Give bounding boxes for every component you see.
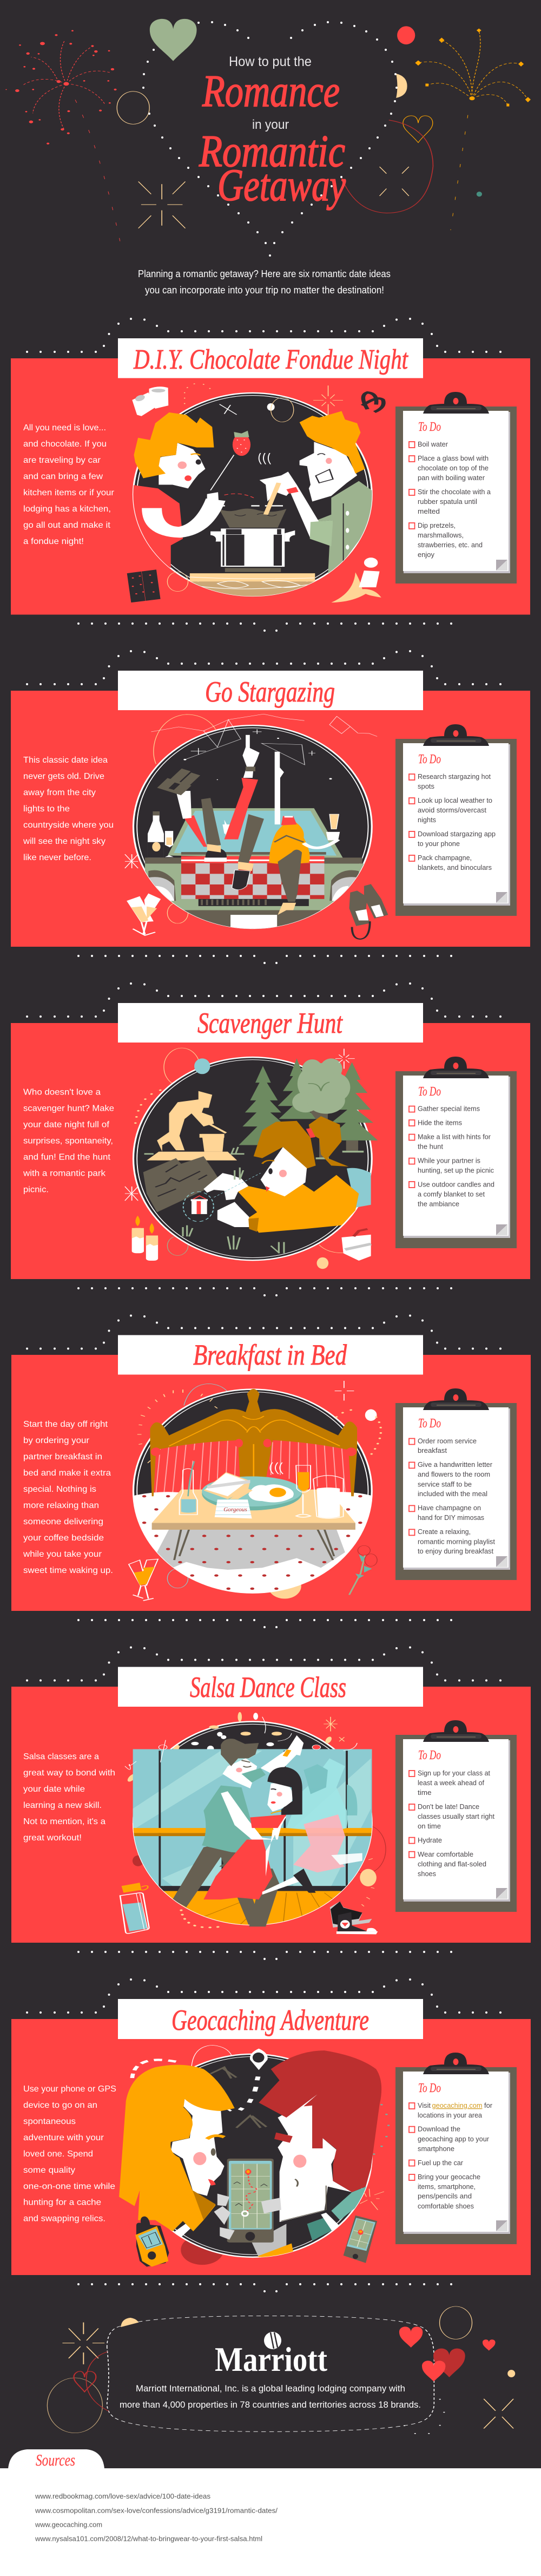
reflection [286,1759,362,1872]
section 5: salsa [11,1648,531,1959]
section 4: breakfast in bed [11,1315,531,1627]
dotted arc [135,1090,161,1125]
icon: circle outline left [47,2378,102,2433]
text block: section 5: learning a new skill. [23,1801,102,1810]
text block: section 4: your coffee bedside [23,1533,104,1543]
to-do clipboard 1: chocolate on top of the [418,464,489,472]
icon: circle outline [117,91,149,124]
to-do clipboard 6: geocaching.com [432,2102,483,2109]
decorations [137,1381,381,1463]
digging figure [144,1091,245,1161]
title: Romantic [199,126,345,176]
banner: section 4 heading: Breakfast in Bed [193,1339,347,1371]
banner: section 1 heading: D.I.Y. Chocolate Fondue Night [133,344,408,375]
icon: cream burst [62,2322,104,2364]
text block: section 2: like never before. [23,853,91,862]
starburst left [138,181,185,228]
to-do clipboard 4: Create a relaxing, [418,1528,471,1536]
to-do clipboard 2: blankets, and binoculars [418,864,492,871]
text block: section 3 [23,1088,114,1194]
to-do clipboard 2: Download stargazing app [418,830,496,838]
text block: section 4: more relaxing than [23,1501,99,1510]
to-do clipboard 1: rubber spatula until [418,498,477,506]
illustration: breakfast in bed [129,1381,381,1601]
banner: section 2 heading: Go Stargazing [205,676,335,708]
icon: GPS device [135,2217,169,2267]
icon: gift box [319,1229,371,1261]
icon: starburst lower [125,1187,138,1201]
to-do clipboard 4: Have champagne on [418,1504,481,1512]
text block: section 4: Start the day off right [23,1420,108,1429]
map stone [143,1156,221,1212]
to-do clipboard 1: enjoy [418,551,435,559]
to-do clipboard 2: to your phone [418,840,460,848]
text block: section 6 [23,2085,116,2224]
icon: cream dot [507,2370,515,2377]
to-do clipboard 3: a comfy blanket to set [418,1191,485,1198]
text block: section 5: Salsa classes are a [23,1752,99,1761]
to-do clipboard 5: Wear comfortable [418,1851,473,1858]
sources list: www.geocaching.com [35,2521,102,2529]
to-do clipboard 5: To Do [418,1748,441,1762]
to-do clipboard 4: Give a handwritten letter [418,1461,492,1469]
text block: section 5 [23,1752,115,1843]
illustration: salsa dancers [120,1712,386,1935]
text block: section 4: partner breakfast in [23,1452,102,1461]
text block: section 3: picnic. [23,1185,49,1194]
sky decorations [167,383,343,592]
dashed frame [107,2316,434,2431]
footprints [191,1713,274,1752]
to-do clipboard 6: To Do [418,2081,441,2095]
panel: section 2 background [11,691,530,947]
to-do clipboard 4: To Do [418,1417,441,1431]
logo: Marriott: Marriott [215,2340,328,2378]
to-do clipboard 6: smartphone [418,2145,454,2153]
text block: section 3: Who doesn't love a [23,1088,101,1097]
man [225,411,365,546]
text block: section 3: surprises, spontaneity, [23,1136,113,1145]
to-do clipboard 5: Sign up for your class at [418,1769,491,1777]
text block: section 6: spontaneous [23,2117,76,2126]
banner: section 3 heading [118,1003,423,1043]
text block: Marriott description: more than 4,000 properties in 78 countries and territories across 18 brands. [120,2400,421,2410]
clothes [252,2224,286,2257]
sources heading: Sources [36,2450,75,2469]
man [219,1735,304,1926]
text block: section 2: This classic date idea [23,756,108,765]
icon: starburst [335,1048,355,1069]
to-do clipboard 3: the ambiance [418,1200,459,1208]
illustration: stargazing on car [125,714,388,939]
breakfast tray [152,1450,355,1560]
banner: section 4 heading [118,1335,423,1375]
text block: section 5: great workout! [23,1833,82,1843]
text block: Marriott description [120,2384,421,2410]
text block: section 4: someone delivering [23,1517,103,1526]
dots below section 2 [78,956,451,963]
stars and lines [183,720,332,780]
icon: phone [344,2216,377,2263]
to-do clipboard 1: Place a glass bowl with [418,455,489,462]
to-do clipboard 6: geocaching app to your [418,2135,489,2143]
decorations [125,1717,377,1928]
sources list: www.cosmopolitan.com/sex-love/confessions/advice/g3191/romantic-dates/ [35,2506,278,2515]
text block: section 2: lights to the [23,804,70,814]
to-do clipboard 3: Use outdoor candles and [418,1181,494,1189]
banner: section 1 heading [118,338,423,378]
to-do clipboard 5: clothing and flat-soled [418,1860,486,1868]
to-do clipboard 1 [395,392,517,584]
to-do clipboard 1: To Do [418,420,441,434]
white footer area [0,2468,541,2576]
text block: section 2: away from the city [23,788,96,797]
header [5,19,531,296]
title: How to put the [229,54,312,69]
to-do clipboard 4: breakfast [418,1447,447,1454]
text block: section 2: countryside where you [23,821,114,830]
left girl [119,2065,235,2231]
to-do clipboard 6: Visit [418,2102,431,2109]
to-do clipboard 3: hunting, set up the picnic [418,1166,494,1174]
icon: roses [349,1545,377,1595]
text block: section 4: bed and make it extra [23,1469,111,1478]
intro text: you can incorporate into your trip no matter the destination! [145,285,384,296]
section 2: stargazing [11,651,530,963]
to-do clipboard 1: Boil water [418,441,448,448]
to-do clipboard 5: shoes [418,1870,436,1878]
text block: section 2: never gets old. Drive [23,772,104,781]
panel: section 3 background [11,1023,530,1279]
section 6: geocaching [11,1979,531,2291]
woman [134,412,270,532]
banner: section 6 heading: Geocaching Adventure [171,2004,369,2036]
illustration: fondue couple [127,383,384,602]
panel: section 5 background [11,1687,531,1943]
to-do clipboard 6: pens/pencils and [418,2192,472,2200]
stargazers [157,735,340,915]
to-do clipboard 1: marshmallows, [418,532,464,539]
intro text: Planning a romantic getaway? Here are six romantic date ideas [138,268,391,279]
to-do clipboard 1: Stir the chocolate with a [418,488,491,496]
to-do clipboard 3: the hunt [418,1143,444,1150]
mountains [210,2067,266,2128]
to-do clipboard 6: items, smartphone, [418,2183,476,2191]
to-do clipboard 6: locations in your area [418,2112,482,2119]
title: Getaway [217,160,346,211]
headboard padding [154,1440,351,1493]
icon: candles [132,1216,158,1261]
text block: section 1 [23,423,115,546]
text block: section 5: your date while [23,1785,85,1794]
to-do clipboard 4 [395,1388,517,1580]
dots above section 4 [27,1315,500,1349]
text block: section 6: and swapping relics. [23,2214,105,2224]
banner: section 6 heading [118,1999,423,2039]
footer decorations [47,2306,515,2434]
panel: section 4 background [11,1355,531,1611]
right guy [259,2050,381,2222]
panel: section 1 background [11,358,530,615]
to-do clipboard 2: Look up local weather to [418,797,492,804]
text block: section 4: sweet time waking up. [23,1566,113,1575]
text block: section 4 [23,1420,113,1575]
to-do clipboard 3: Gather special items [418,1105,480,1113]
icon: mimosa flutes [129,1559,158,1601]
road and pin [228,2049,268,2110]
dots below section 6 [78,2284,451,2291]
title: in your [252,117,289,132]
text block: section 6: some quality [23,2166,75,2175]
to-do clipboard 6: comfortable shoes [418,2203,474,2210]
icon: champagne flutes [127,893,161,935]
to-do clipboard 5 [395,1720,517,1912]
text block: section 4: while you take your [23,1550,102,1559]
starburst [360,2189,384,2210]
title [199,54,346,211]
icon: water bottle [120,1883,149,1933]
text block: section 3: scavenger hunt? Make [23,1104,114,1113]
to-do clipboard 5: Hydrate [418,1837,442,1844]
to-do clipboard 2 [395,724,517,916]
sources list: www.redbookmag.com/love-sex/advice/100-date-ideas [35,2492,211,2500]
text block: section 6: Use your phone or GPS [23,2085,116,2094]
text block: section 1: are traveling by car [23,456,101,465]
to-do clipboard 4: hand for DIY mimosas [418,1514,484,1522]
intro text [138,268,391,296]
text block: section 5: great way to bond with [23,1768,115,1778]
panel: section 6 background [11,2019,531,2275]
dots above section 3 [27,984,500,1017]
dots above section 5 [27,1648,500,1680]
dark red swirl [341,120,433,213]
girl [183,1116,371,1253]
to-do clipboard 4: included with the meal [418,1490,487,1498]
icon: pretzel [362,392,384,412]
to-do clipboard 3: To Do [418,1085,441,1099]
text block: section 1: and can bring a few [23,472,103,481]
text block: section 5: Not to mention, it's a [23,1817,105,1826]
teal dots [373,2104,390,2155]
to-do clipboard 1: melted [418,508,440,515]
champagne on hood [148,811,164,857]
to-do clipboard 1: pan with boiling water [418,474,485,482]
icon: starburst [125,854,138,868]
to-do clipboard 4: service staff to be [418,1480,472,1488]
to-do clipboard 3: While your partner is [418,1157,480,1165]
dots [405,2399,444,2434]
pot [210,506,295,567]
banner: section 5 heading: Salsa Dance Class [190,1671,346,1703]
text block: section 1: lodging has a kitchen, [23,504,111,514]
woman dancer [203,1767,316,1899]
text block: Marriott description: Marriott International, Inc. is a global leading lodging company with [136,2384,405,2394]
pine trees [239,1058,378,1152]
to-do clipboard 6 [395,2053,517,2244]
to-do clipboard 6: Download the [418,2125,460,2133]
to-do clipboard 2: nights [418,816,436,824]
to-do clipboard 4: romantic morning playlist [418,1538,496,1546]
to-do clipboard 5: least a week ahead of [418,1779,485,1787]
text block: section 6: loved one. Spend [23,2149,93,2159]
icon: red firework [5,30,120,241]
footer: Marriott [47,2306,515,2434]
icon: teal dot [477,192,482,196]
icon: half moon [121,2318,138,2327]
text block: section 3: with a romantic park [23,1169,106,1178]
dots above section 6 [27,1979,500,2013]
to-do clipboard 4: Order room service [418,1437,477,1445]
icon: cream oval [317,1257,328,1269]
to-do clipboard 6: Fuel up the car [418,2159,463,2167]
icon: cracker [127,569,161,602]
icon: hearts [399,2326,496,2382]
banner: section 5 heading [118,1667,423,1707]
text block: section 3: and fun! End the hunt [23,1152,111,1162]
to-do clipboard 5: time [418,1789,432,1797]
header decorations [5,19,531,241]
text block: section 1: a fondue night! [23,537,84,546]
text block: section 6: adventure with your [23,2133,104,2142]
to-do clipboard 3 [395,1057,517,1248]
icon: red circle [397,26,415,44]
round tree [292,1058,350,1159]
icon: sneakers [330,1902,378,1935]
icon: circle outline right [440,2306,472,2339]
headboard frame [150,1389,357,1496]
text block: section 2 [23,756,114,862]
icon: gold heart outline [403,116,433,142]
to-do clipboard 2: Research stargazing hot [418,773,491,781]
dots below section 1 [78,624,451,631]
to-do clipboard 1: strawberries, etc. and [418,541,483,549]
title: Romance [202,66,340,116]
dots above section 1 [27,319,500,352]
central phone [214,2159,281,2243]
constellations outside [151,714,377,923]
sources list: www.nysalsa101.com/2008/12/what-to-bringwear-to-your-first-salsa.html [35,2534,262,2542]
dots below section 3 [78,1288,451,1295]
text block: section 1: go all out and make it [23,521,111,530]
icon: teal moon [194,1058,210,1074]
section 1: chocolate fondue [11,319,530,631]
dots above section 2 [27,651,500,684]
dashed path [132,2060,176,2078]
icon: heart outline [74,2371,96,2392]
dots below section 5 [78,1952,451,1959]
car [171,810,340,857]
text block: section 1: kitchen items or if your [23,488,115,497]
to-do clipboard 5: Don't be late! Dance [418,1803,479,1811]
icon: moon [396,74,407,98]
text block: section 6: device to go on an [23,2101,97,2110]
icon: binoculars [349,884,388,939]
mirror [133,1749,373,1886]
icon: green heart [150,19,197,61]
illustration: geocaching couple [119,2045,390,2267]
breakfast tray: Gorgeous [223,1507,247,1513]
banner: section 3 heading: Scavenger Hunt [197,1007,344,1039]
icon: marshmallows [132,386,168,416]
bedding [131,1492,374,1597]
to-do clipboard 2: spots [418,783,434,790]
to-do clipboard 4: and flowers to the room [418,1471,490,1478]
illustration: scavenger hunt [125,1048,378,1269]
to-do clipboard 6: Bring your geocache [418,2173,480,2181]
text block: section 6: hunting for a cache [23,2198,101,2207]
icon: gold firework [415,29,531,230]
text block: section 1: All you need is love... [23,423,106,432]
to-do clipboard 6: for [484,2102,492,2109]
icon: X burst [484,2399,513,2428]
icon: banana with marshmallows [331,558,381,602]
to-do clipboard 2: Pack champagne, [418,854,472,862]
dotted heart [143,22,397,255]
swirl [86,2351,109,2411]
to-do clipboard 3: Make a list with hints for [418,1133,491,1141]
starburst right [380,167,409,196]
text block: section 4: by ordering your [23,1436,90,1445]
text block: section 2: will see the night sky [23,837,105,846]
text block: section 1: and chocolate. If you [23,440,107,449]
to-do clipboard 3: Hide the items [418,1119,462,1127]
text block: section 6: one-on-one time while [23,2182,115,2191]
text block: section 4: special. Nothing is [23,1485,96,1494]
sources tab [8,2449,104,2469]
to-do clipboard 5: on time [418,1823,441,1830]
to-do clipboard 1: Dip pretzels, [418,522,456,529]
sources panel [0,2449,541,2576]
banner: section 2 heading [118,671,423,710]
dots below section 4 [78,1620,451,1627]
to-do clipboard 2: To Do [418,752,441,766]
section 3: scavenger hunt [11,984,530,1295]
to-do clipboard 5: classes usually start right [418,1813,495,1820]
text block: section 3: your date night full of [23,1120,110,1129]
to-do clipboard 2: avoid storms/overcast [418,807,487,814]
to-do clipboard 4: to enjoy during breakfast [418,1548,494,1555]
sources list [35,2492,278,2542]
